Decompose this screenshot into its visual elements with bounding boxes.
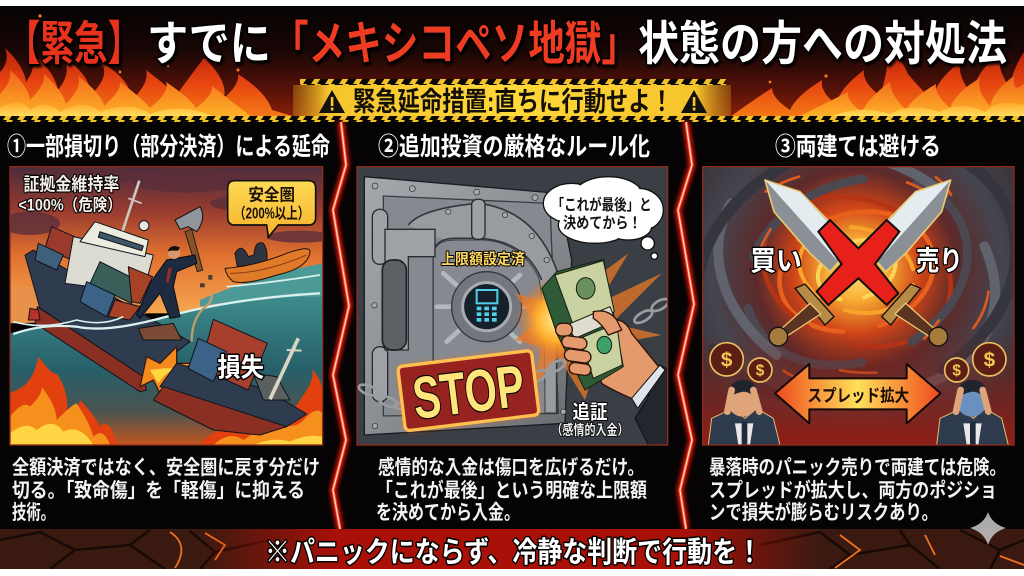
hand palm — [600, 319, 659, 400]
thought bubble — [543, 177, 663, 259]
spread arrow — [775, 364, 941, 423]
limit set label: 上限額設定済 — [441, 250, 525, 268]
sky — [10, 167, 323, 313]
icon: sparkle watermark — [970, 512, 1006, 545]
heading 2: ②追加投資の厳格なルール化 — [378, 133, 650, 161]
heading 3: ③両建ては避ける — [775, 133, 941, 161]
icon: warning left — [319, 90, 345, 113]
chains — [357, 297, 670, 409]
explosion — [140, 347, 193, 393]
title: Mexican peso hell: 「メキシコペソ地獄」 — [272, 17, 638, 70]
top white edge — [0, 0, 1024, 6]
margin call label — [558, 400, 622, 438]
safe zone bubble: （200%以上） — [234, 206, 309, 223]
money stack — [542, 259, 623, 390]
body text 1: 技術。 — [12, 500, 55, 524]
margin call label: 追証 — [572, 401, 607, 423]
sell label: 売り — [916, 245, 963, 276]
water line — [13, 293, 320, 334]
panel 3: hedging danger — [702, 166, 1015, 446]
STOP sign — [397, 349, 540, 433]
dollar signs: $ — [756, 363, 765, 380]
body text 3: ンで損失が膨らむリスクあり。 — [709, 500, 938, 524]
header fire background — [0, 6, 1024, 118]
margin ratio label: 証拠金維持率 — [23, 175, 119, 195]
body text 2: 感情的な入金は傷口を広げるだけ。 — [378, 455, 644, 479]
lifeboat — [225, 243, 310, 282]
dollar signs: $ — [952, 363, 961, 380]
banner text: 緊急延命措置:直ちに行動せよ！ — [353, 87, 673, 117]
body text 2: を決めてから入金。 — [376, 501, 520, 524]
hand fingers and thumb — [556, 311, 622, 376]
trader right — [937, 380, 1008, 445]
safe zone bubble — [228, 181, 316, 237]
dollar signs — [721, 351, 995, 377]
trader left — [708, 380, 780, 445]
margin call label: （感情的入金） — [551, 422, 629, 438]
red X — [817, 220, 899, 305]
dollar signs: $ — [721, 349, 733, 372]
body text 1 — [12, 456, 320, 524]
lower red fade — [703, 344, 1014, 444]
explosion burst — [515, 253, 662, 400]
body text 2: 「これが最後」という明確な上限額 — [376, 478, 647, 502]
sea — [10, 293, 323, 445]
title: already: すでに — [147, 17, 271, 70]
margin ratio label — [18, 175, 122, 215]
title — [7, 17, 1007, 70]
title: urgent bracket: 【緊急】 — [7, 17, 141, 70]
icon: keypad — [477, 290, 497, 322]
divider left — [333, 122, 349, 529]
margin ratio label: <100%（危険） — [18, 196, 122, 215]
bottom white edge — [0, 569, 1024, 576]
spread arrow: スプレッド拡大 — [807, 385, 909, 405]
hazard stripe — [0, 116, 1024, 122]
footer lava band — [0, 529, 1024, 569]
heading 1: ①一部損切り（部分決済）による延命 — [7, 133, 330, 161]
sell sword — [876, 180, 951, 346]
fire at bottom — [10, 357, 323, 445]
lower ship — [153, 319, 307, 435]
dollar bubbles — [710, 343, 1006, 382]
upper ship — [25, 181, 190, 392]
warning banner — [293, 79, 731, 117]
panel 2: vault — [357, 167, 670, 445]
footer message: ※パニックにならず、冷静な判断で行動を！ — [265, 536, 762, 569]
icon: warning right — [681, 90, 707, 113]
STOP sign: STOP — [409, 352, 528, 432]
buy label: 買い — [750, 245, 802, 276]
body text 1: 切る。「致命傷」を「軽傷」に抑える — [12, 479, 305, 502]
thought bubble: 「これが最後」と — [552, 196, 652, 214]
dollar signs: $ — [984, 349, 996, 372]
thought bubble: 決めてから！ — [563, 214, 641, 232]
safe zone bubble: 安全圏 — [248, 185, 295, 205]
rope and debris — [192, 292, 212, 342]
vault door — [364, 177, 572, 435]
man with axe — [137, 207, 203, 318]
vault wheel — [437, 272, 528, 342]
buy sword — [765, 180, 840, 346]
suit sleeve — [632, 365, 668, 445]
loss label: 損失 — [217, 352, 264, 382]
body text 3 — [709, 455, 1006, 524]
swirl strokes — [704, 167, 1013, 391]
body text 2 — [376, 455, 647, 524]
panel 1: sinking ship — [0, 165, 333, 445]
body text 1: 全額決済ではなく、安全圏に戻す分だけ — [12, 456, 320, 479]
divider right — [678, 122, 694, 529]
